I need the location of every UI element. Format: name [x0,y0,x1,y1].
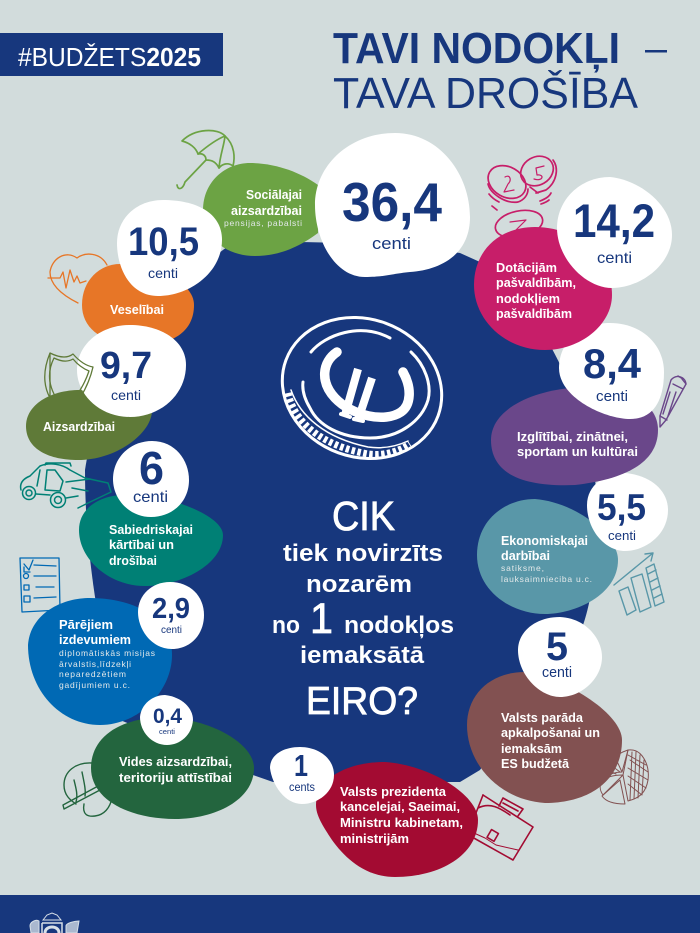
label: debt service [501,710,600,771]
panel: grants to municipalities [474,227,612,350]
icon: pie chart [598,750,648,804]
central question text: nozarēm [306,571,412,598]
icon: coins [482,150,559,242]
label: public order: drošībai [109,553,157,568]
central question text: tiek novirzīts [283,540,443,567]
label: environment [119,754,232,785]
label: ministries: ministrijām [340,831,409,846]
label: municipalities: nodokļiem [496,291,560,306]
icon: police car [21,463,111,508]
label: social protection: Sociālajai [246,187,302,202]
label: other expenditure [59,617,155,690]
label: economic activity [501,533,592,584]
blob: ministries [316,762,478,877]
label: ministries [340,784,463,846]
title: TAVI NODOKĻI [333,24,620,73]
label: economic activity: lauksaimnieciba u.c. [501,574,592,584]
bubble: 10,5 centi [117,200,222,296]
hashtag banner [0,33,223,76]
blob: public order [79,495,223,586]
panel: public order and safety [79,495,223,586]
label: ministries: kancelejai, Saeimai, [340,799,460,814]
footer band [0,895,700,933]
title: TAVA DROŠĪBA [333,68,639,118]
label: other expenditure: izdevumiem [59,632,131,647]
bubble: 5 centi: 5 [546,625,568,669]
label: health: Veselībai [110,302,164,317]
bubble: 2,9 centi: 2,9 [152,593,190,625]
central question text: CIK [332,493,395,539]
label: public order [109,522,193,568]
central question text: iemaksātā [300,642,425,669]
bubble: 5,5 centi [587,473,668,551]
label: debt service: iemaksām [501,741,562,756]
bubble: 0,4 centi [140,695,193,745]
label: ministries: Valsts prezidenta [340,784,447,799]
label: economic activity: satiksme, [501,563,544,573]
label: municipalities: pašvaldībām [496,306,572,321]
panel: economic activity [477,499,618,614]
bubble: 2,9 centi [138,582,204,649]
central question text: nodokļos [344,612,454,639]
bubble: 8,4 centi: centi [596,388,628,405]
label: municipalities: Dotācijām [496,260,557,275]
blob: economic activity [477,499,618,614]
bubble: 6 centi [113,441,189,517]
bubble: 0,4 centi: 0,4 [153,705,182,728]
logo: coat of arms [30,913,79,933]
panel: other expenditure [28,598,172,725]
label: other expenditure: neparedzētiem [59,669,126,679]
label: economic activity: Ekonomiskajai [501,533,588,548]
bubble: 2,9 centi: centi [161,625,182,636]
bubble: 5,5 centi: 5,5 [597,487,646,528]
central question text [272,493,454,723]
label: environment: Vides aizsardzībai, [119,754,232,769]
central question text: EIRO? [306,680,418,723]
bubble: 36,4 centi [315,133,470,277]
bubble: 5 centi: centi [542,664,572,681]
bubble: 36,4 centi: 36,4 [342,171,442,233]
bubble: 14,2 centi: 14,2 [573,194,655,247]
bubble: 8,4 centi [559,323,664,419]
bubble: 1 cents: 1 [294,748,308,783]
label: other expenditure: ārvalstis,līdzekļi [59,659,131,669]
bubble: 6 centi: centi [133,489,168,506]
icon: pencil [660,376,686,427]
blob: health [82,264,194,345]
blob: education [491,387,658,485]
icon: leaf [63,763,112,816]
bubble: 6 centi: 6 [139,442,164,494]
label: other expenditure: gadījumiem u.c. [59,680,130,690]
label: debt service: Valsts parāda [501,710,584,725]
title [333,24,667,118]
label: defence: Aizsardzībai [43,419,115,434]
icon: checklist [20,558,60,612]
label: education: sportam un kultūrai [517,444,638,459]
label: ministries: Ministru kabinetam, [340,815,463,830]
label: debt service: apkalpošanai un [501,725,600,740]
central question text: 1 [310,595,333,643]
panel: education, science, sport and culture [491,387,658,485]
bubble: 9,7 centi: centi [111,387,141,403]
central question text: no [272,612,300,639]
bubble: 14,2 centi [557,177,672,288]
label: municipalities: pašvaldībām, [496,275,576,290]
blob: other expenditure [28,598,172,725]
blob: debt service [467,672,622,803]
bubble: 10,5 centi: 10,5 [128,220,199,264]
label: public order: kārtībai un [109,537,174,552]
label: municipalities [496,260,576,321]
blob: environment [91,717,254,819]
bubble: 1 cents: cents [289,780,315,794]
label: education [517,429,638,459]
bubble: 5,5 centi: centi [608,528,636,543]
bubble: 0,4 centi: centi [159,729,175,736]
label: debt service: ES budžetā [501,756,570,771]
label: other expenditure: diplomātiskās misijas [59,648,155,658]
navy central shape [85,242,597,782]
icon: briefcase [472,795,533,860]
panel: health [82,264,194,345]
bubble: 36,4 centi: centi [372,234,411,253]
label: education: Izglītībai, zinātnei, [517,429,628,444]
bubble: 10,5 centi: centi [148,265,178,281]
label: other expenditure: Pārējiem [59,617,113,632]
blob: social protection [203,163,318,256]
icon: umbrella [177,131,234,189]
icon: bar chart with arrow [614,553,664,615]
blob: defence [26,390,152,460]
icon: shield [45,353,93,398]
label: public order: Sabiedriskajai [109,522,193,537]
label: social protection: aizsardzībai [231,203,302,218]
panel: president, parliament, cabinet, ministries [316,762,478,877]
label: social protection: pensijas, pabalsti [224,218,302,228]
bubble: 14,2 centi: centi [597,250,632,267]
panel: defence [26,390,152,460]
label: social protection [224,187,302,228]
bubble: 5 centi [518,617,602,697]
icon: euro coin [262,295,462,481]
bubble: 9,7 centi: 9,7 [100,345,152,387]
bubble: 9,7 centi [77,325,186,417]
bubble: 8,4 centi: 8,4 [583,340,642,387]
label: economic activity: darbībai [501,548,550,563]
bubble: 1 cents [270,747,334,804]
panel: debt service and EU budget [467,672,622,803]
label: environment: teritoriju attīstībai [119,770,232,785]
blob: municipalities [474,227,612,350]
hashtag banner: #BUDŽETS2025 [18,42,201,72]
panel: environment [91,717,254,819]
icon: heart with pulse [48,254,107,303]
panel: social protection [203,163,318,256]
